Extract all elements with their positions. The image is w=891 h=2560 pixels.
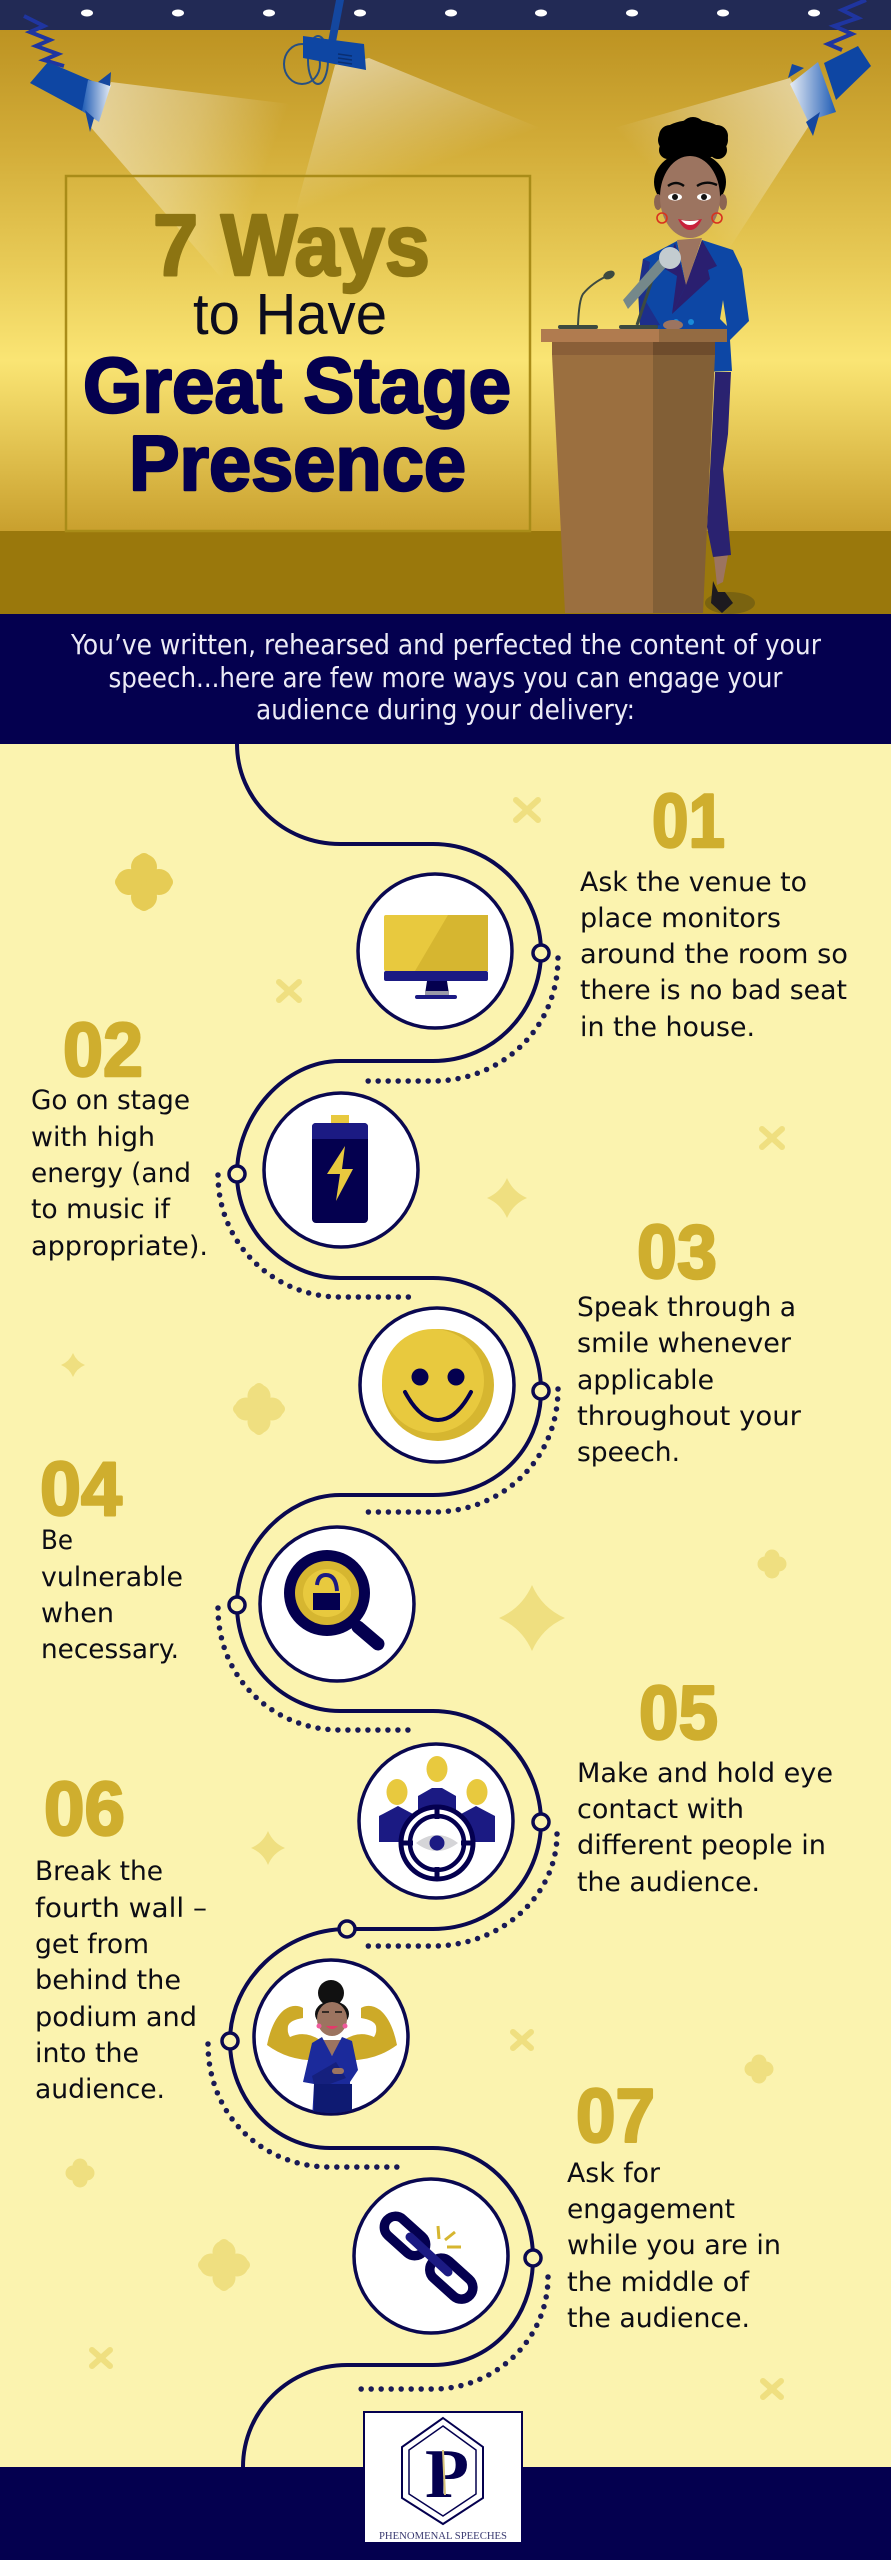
intro text: speech...here are few more ways you can engage your [108, 661, 783, 694]
step 05: 05 [639, 1671, 718, 1756]
step 03 [577, 1210, 802, 1468]
step 05 [577, 1671, 833, 1898]
panel: body background [0, 744, 891, 2467]
panel: intro band [0, 614, 891, 744]
icon: smiley [360, 1308, 514, 1462]
step 06: 06 [44, 1767, 125, 1852]
winding path [230, 744, 541, 2467]
step 02: to music if [31, 1194, 171, 1225]
step 01: 01 [652, 779, 725, 864]
step 01: Ask the venue to [580, 867, 807, 898]
step 06: get from [35, 1929, 149, 1960]
step 02: energy (and [31, 1158, 191, 1189]
step 04: 04 [40, 1447, 122, 1532]
step 06: into the [35, 2038, 139, 2069]
step 03: throughout your [577, 1401, 802, 1432]
spotlight: right [788, 0, 871, 136]
light beams [88, 58, 812, 281]
step 06: fourth wall – [35, 1893, 207, 1924]
step 04: Be [41, 1525, 73, 1556]
ceiling bar with lights [0, 0, 891, 30]
step 03: Speak through a [577, 1292, 796, 1323]
step 05: contact with [577, 1794, 744, 1825]
intro text: audience during your delivery: [256, 693, 635, 726]
icon: broken chain [354, 2179, 508, 2333]
panel: stage header [0, 0, 891, 614]
step 07: 07 [576, 2074, 655, 2159]
step 02: 02 [63, 1008, 143, 1093]
logo [364, 2412, 522, 2543]
step 07 [567, 2074, 781, 2334]
path nodes [222, 945, 549, 2266]
step 02 [31, 1008, 208, 1262]
step 01: in the house. [580, 1012, 755, 1043]
step 06: Break the [35, 1856, 163, 1887]
stage floor [0, 531, 891, 614]
step 02: with high [31, 1122, 155, 1153]
intro text: You’ve written, rehearsed and perfected the content of your [70, 628, 821, 661]
step 04 [40, 1447, 183, 1665]
step 02: appropriate). [31, 1231, 208, 1262]
spotlight: left [24, 16, 111, 132]
stage wall [0, 30, 891, 531]
icon: battery [264, 1093, 418, 1247]
step 07: engagement [567, 2194, 735, 2225]
dotted accent paths [208, 958, 558, 2389]
icon: audience and target eye [359, 1744, 513, 1898]
speaker figure [638, 117, 755, 614]
footer band [0, 2467, 891, 2560]
step 01 [580, 779, 848, 1043]
decorative shapes [61, 800, 786, 2397]
step 07: the audience. [567, 2303, 750, 2334]
step 05: different people in [577, 1830, 826, 1861]
icon: magnifier with lock [260, 1527, 414, 1681]
step 06: behind the [35, 1965, 181, 1996]
step 03: speech. [577, 1437, 680, 1468]
step 04: when [41, 1598, 114, 1629]
step 02: Go on stage [31, 1085, 190, 1116]
icon: strong woman [254, 1960, 408, 2120]
step 01: there is no bad seat [580, 975, 847, 1006]
title: Presence [129, 419, 466, 507]
microphones [558, 247, 681, 329]
step 07: Ask for [567, 2158, 661, 2189]
step 07: while you are in [567, 2230, 781, 2261]
step 01: around the room so [580, 939, 848, 970]
step 06: audience. [35, 2074, 165, 2105]
logo: PHENOMENAL SPEECHES [379, 2530, 507, 2542]
title: 7 Ways [153, 197, 430, 294]
step 06: podium and [35, 2002, 197, 2033]
title [83, 197, 511, 507]
logo: P [425, 2436, 469, 2513]
step 04: necessary. [41, 1634, 179, 1665]
spotlight: centre [284, 0, 366, 84]
step 03: applicable [577, 1365, 714, 1396]
step 07: the middle of [567, 2267, 751, 2298]
step 03: smile whenever [577, 1328, 792, 1359]
title frame [66, 176, 530, 531]
podium [541, 329, 727, 613]
step 05: the audience. [577, 1867, 760, 1898]
step 05: Make and hold eye [577, 1758, 833, 1789]
step 04: vulnerable [41, 1562, 183, 1593]
step 01: place monitors [580, 903, 781, 934]
icon: monitor [358, 874, 512, 1028]
title: Great Stage [83, 341, 511, 429]
intro text [70, 628, 821, 726]
title: to Have [193, 282, 387, 347]
step 06 [35, 1767, 207, 2105]
step 03: 03 [637, 1210, 717, 1295]
